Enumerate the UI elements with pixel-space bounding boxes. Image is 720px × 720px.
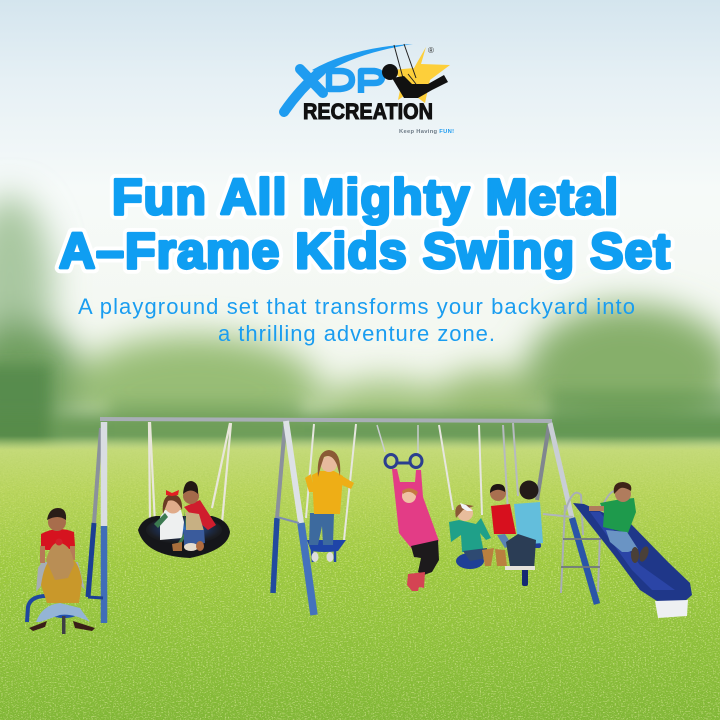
nest swing with two children [138,422,231,558]
title: Fun All Mighty Metal [112,169,618,225]
child: boy in red [36,508,85,592]
child: arm [589,506,604,511]
logo: X letter [284,69,323,112]
glider seat [522,544,528,586]
ladder [561,491,616,593]
nest seat [138,516,230,558]
child: boy in red cape [183,481,216,551]
seesaw glider with two children [27,508,95,634]
child: head [402,489,416,503]
child: arms [305,474,354,492]
trapeze bar with hanging girl [377,425,439,591]
background: grass field [0,436,720,720]
belt swing with girl in yellow [305,424,356,562]
logo: registered mark: ® [428,46,434,55]
child: head [615,486,631,502]
title: A–Frame Kids Swing Set [59,223,670,279]
child: head and bow [457,505,473,521]
slide with boy [573,482,692,618]
frame: front legs [101,422,107,526]
logo: blue swoosh [312,44,413,74]
logo: star [392,47,450,103]
child: girl with red bow [154,490,188,551]
logo: tagline: Keep Having FUN! [399,129,454,135]
title: line 1: Fun All Mighty Metal [112,169,618,225]
swing ropes [306,424,356,540]
child: yellow top [312,471,343,514]
child: jeans [606,530,638,552]
logo: D and P letters [329,71,382,93]
swing seat [456,553,484,569]
subtitle: a thrilling adventure zone. [218,321,495,346]
swing seat [307,540,346,552]
swing with seated girl in teal [439,425,507,569]
frame: top bar [100,419,552,421]
child: boy in blue from behind [505,480,543,570]
child: head [321,456,337,472]
child: shoes [631,547,639,563]
background: sky [0,0,720,450]
trapeze ropes and handles [377,425,418,453]
title: line 2: A–Frame Kids Swing Set [59,223,670,279]
child: jeans and boots [463,548,487,561]
logo [284,44,454,135]
slide exit lip [655,600,688,618]
slide chute [573,503,692,601]
logo: RECREATION wordmark: RECREATION [303,99,433,124]
subtitle: A playground set that transforms your backyard into [78,294,635,319]
subtitle [78,294,635,346]
frame: back legs [94,428,101,523]
child: green shirt [600,498,636,533]
nest ropes [149,422,231,545]
child: leggings [411,540,439,575]
background: blurred tree line [0,195,720,450]
logo: swinging child silhouette [382,44,448,98]
title [59,169,670,279]
child: boy in red [490,484,516,548]
child: shoes [407,572,425,591]
glider seat [27,596,78,622]
swing set frame [88,419,597,623]
child: arms and pink top [392,469,439,549]
child: legs [309,513,334,545]
swing ropes [439,425,482,515]
glider ropes [503,423,518,530]
glider with two boys [490,423,543,586]
frame: braces [277,517,299,523]
child: girl in yellow from behind [29,538,95,631]
child: teal top [449,518,491,553]
